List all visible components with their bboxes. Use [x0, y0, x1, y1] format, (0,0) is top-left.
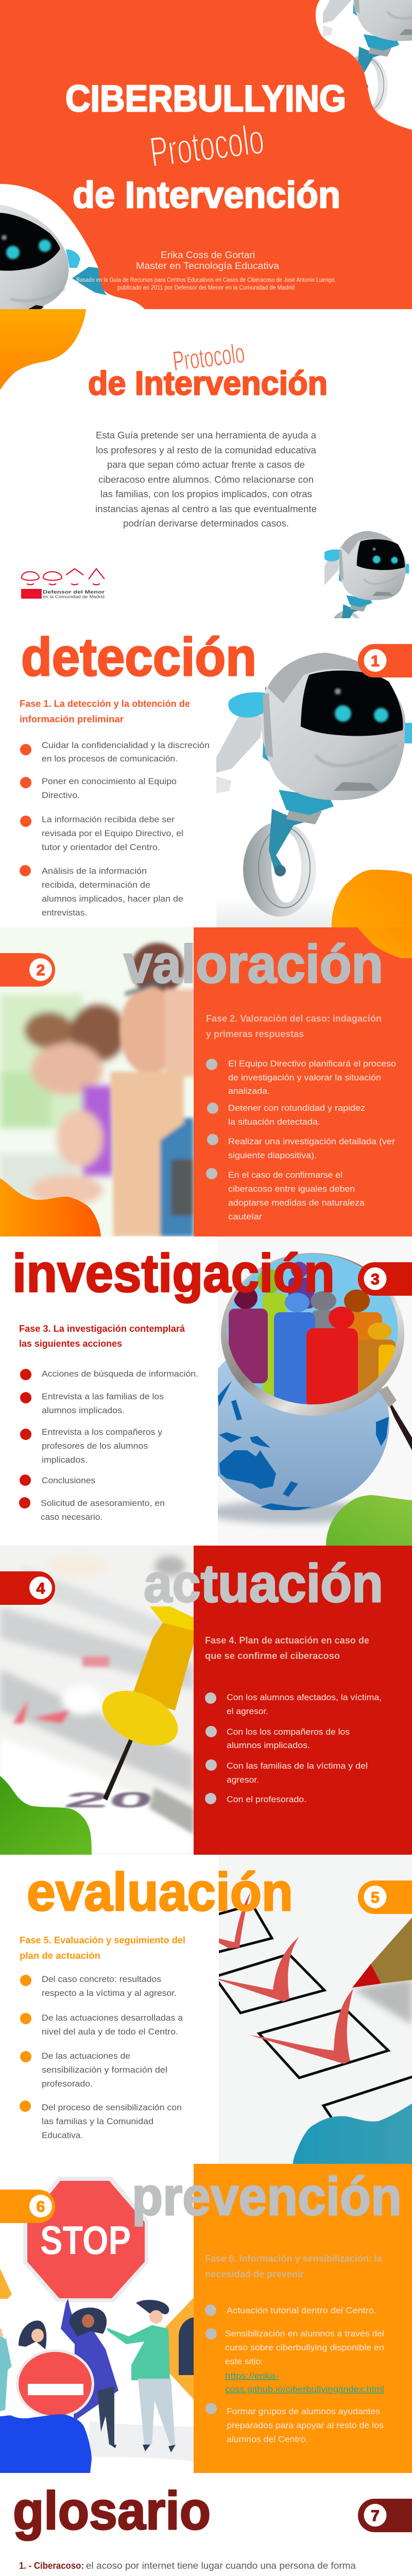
green blob	[0, 1776, 92, 1855]
bullet list: alumnos implicados.	[227, 1741, 310, 1750]
orange panel	[194, 2164, 412, 2473]
bullet list: https://erika-	[225, 2371, 279, 2381]
panel: actuación	[0, 1546, 412, 1855]
source note: Basado en la Guía de Recursos para Centros Educativos en Casos de Ciberacoso de José Antonio Luengo,	[76, 277, 336, 283]
bullet list: alumnos del Centro.	[227, 2435, 308, 2444]
bullet list: respecto a la víctima y al agresor.	[42, 1989, 177, 1998]
bullet list: profesores de los alumnos	[42, 1442, 148, 1451]
script word Protocolo: Protocolo	[171, 337, 246, 377]
bullet list: Realizar una investigación detallada (ver	[228, 1137, 396, 1146]
image: checklist with pencil	[203, 1855, 412, 2164]
phase title	[20, 1935, 185, 1961]
bullet list	[205, 1692, 382, 1804]
bullet list: ciberacoso entre iguales deben	[228, 1184, 355, 1194]
bullet list: Del caso concreto: resultados	[42, 1975, 161, 1984]
bullet list: Poner en conocimiento al Equipo	[42, 777, 177, 786]
heading investigación: investigación	[12, 1244, 335, 1303]
bullet list: las familias y la Comunidad	[42, 2117, 153, 2126]
logo: Defensor del Menor	[21, 569, 105, 599]
phase title: Fase 4. Plan de actuación en caso de	[205, 1635, 369, 1646]
phase title: que se confirme el ciberacoso	[205, 1651, 340, 1661]
badge 1	[358, 644, 412, 677]
heading de Intervención: de Intervención	[88, 364, 328, 402]
intro text: para que sepan cómo actuar frente a casos de	[107, 460, 305, 470]
heading valoración: valoración	[124, 935, 383, 994]
illustration: people with traffic signs: STOP	[40, 2217, 131, 2263]
small robot	[324, 531, 409, 618]
orange blob on panel	[357, 927, 412, 958]
bullet list: Cuidar la confidencialidad y la discreción	[42, 741, 210, 750]
bullet list: nivel del aula y de todo el Centro.	[42, 2027, 178, 2037]
badge 6	[0, 2190, 55, 2223]
photo: students at computers	[0, 927, 196, 1236]
photo: calendar with yellow pin: 20	[62, 1788, 157, 1812]
panel: glosario	[13, 2481, 412, 2576]
bullet list	[205, 2304, 384, 2444]
glossary term 1: 1. - Ciberacoso:	[19, 2561, 84, 2571]
phase title	[205, 2253, 383, 2279]
green blob	[326, 1495, 412, 1546]
title CIBERBULLYING: CIBERBULLYING	[65, 78, 346, 120]
bullet list: cautelar	[228, 1212, 263, 1222]
bullet list: profesorado.	[42, 2079, 93, 2089]
bullet list: en los procesos de comunicación.	[42, 754, 178, 764]
bullet list: La información recibida debe ser	[42, 815, 175, 824]
bullet list	[19, 1369, 198, 1522]
glossary term 1	[19, 2561, 392, 2576]
phase title: Fase 5. Evaluación y seguimiento del	[20, 1935, 185, 1945]
bullet list: Formar grupos de alumnos ayudantes	[227, 2407, 380, 2416]
phase title	[205, 1635, 369, 1661]
glossary term 1: el acoso por internet tiene lugar cuando una persona de forma	[86, 2561, 356, 2571]
blue blob	[0, 2414, 92, 2473]
heading detección: detección	[21, 628, 256, 687]
white blob with robot bottom left	[0, 184, 145, 309]
phase title: Fase 6. Información y sensibilización: la	[205, 2253, 383, 2264]
phase title: y primeras respuestas	[206, 1029, 304, 1039]
bullet list: revisada por el Equipo Directivo, el	[42, 829, 183, 838]
heading actuación: actuación	[144, 1554, 383, 1614]
bullet list: Entrevista a los compañeros y	[42, 1428, 163, 1437]
orange panel	[194, 927, 412, 1236]
bullet list: implicados.	[42, 1455, 88, 1465]
bullet list: Análisis de la información	[42, 867, 147, 876]
bullet list: alumnos implicados.	[42, 1406, 125, 1415]
orange blob	[332, 870, 412, 958]
phase title: las siguientes acciones	[19, 1338, 122, 1349]
author	[136, 249, 280, 271]
source note	[76, 277, 336, 291]
bullet list	[20, 1975, 183, 2140]
phase title: Fase 2. Valoración del caso: indagación	[206, 1013, 382, 1024]
bullet list: Solicitud de asesoramiento, en	[41, 1499, 165, 1508]
bullet list: Del proceso de sensibilización con	[42, 2103, 182, 2112]
bullet list: agresor.	[227, 1775, 259, 1785]
intro text: podrían derivarse determinados casos.	[123, 518, 289, 529]
bullet list: de investigación y valorar la situación	[228, 1073, 381, 1082]
badge 6: 6	[37, 2198, 45, 2215]
bullet list: De las actuaciones desarrolladas a	[42, 2013, 183, 2023]
phase title: información preliminar	[20, 714, 124, 724]
bullet list: El Equipo Directivo planificará el proceso	[228, 1059, 396, 1069]
author: Erika Coss de Gortari	[161, 249, 255, 260]
phase title: Fase 3. La investigación contemplará	[19, 1324, 185, 1334]
red panel	[194, 1546, 412, 1855]
white blob with robot top right	[316, 0, 412, 130]
phase title	[20, 699, 190, 724]
badge 5: 5	[371, 1889, 380, 1906]
phase title: plan de actuación	[20, 1951, 100, 1961]
badge 7	[358, 2499, 412, 2532]
bullet list: De las actuaciones de	[42, 2052, 130, 2061]
bullet list: Conclusiones	[42, 1476, 95, 1485]
badge 7: 7	[371, 2507, 380, 2524]
author: Master en Tecnología Educativa	[136, 260, 280, 271]
bullet list: Detener con rotundidad y rapidez	[228, 1104, 365, 1113]
intro text: instancias ajenas al centro a las que eventualmente	[95, 504, 317, 514]
bullet list: Con el profesorado.	[227, 1795, 306, 1804]
orange blob	[0, 309, 86, 390]
hero script word Protocolo: Protocolo	[147, 115, 267, 176]
panel: evaluación	[20, 1855, 412, 2164]
badge 2	[0, 953, 55, 987]
panel: introduction	[0, 309, 409, 618]
intro text: ciberacoso entre alumnos. Cómo relacionarse con	[98, 474, 314, 485]
intro text: los profesores y al resto de la comunidad educativa	[96, 445, 317, 455]
photo: calendar with yellow pin	[0, 1546, 194, 1855]
bullet list: En el caso de confirmarse el	[228, 1171, 342, 1180]
badge 3: 3	[371, 1271, 380, 1288]
bullet list: Con las familias de la víctima y del	[227, 1761, 368, 1771]
title de Intervención: de Intervención	[73, 175, 340, 216]
bullet list: el agresor.	[227, 1707, 268, 1716]
panel: prevención	[0, 2164, 412, 2473]
bullet list: caso necesario.	[41, 1513, 102, 1522]
bullet list: Con los alumnos afectados, la víctima,	[227, 1693, 382, 1702]
bullet list: la situación detectada.	[228, 1117, 320, 1127]
bullet list: tutor y orientador del Centro.	[42, 843, 160, 852]
bullet list: curso sobre ciberbullying disponible en	[225, 2343, 384, 2352]
bullet list: Entrevista a las familias de los	[42, 1392, 164, 1401]
badge 1: 1	[371, 653, 380, 670]
source note: publicado en 2011 por Defensor del Menor en la Comunidad de Madrid	[117, 285, 295, 291]
bullet list: coss.github.io/ciberbullying/index.html	[225, 2385, 384, 2394]
logo: Defensor del Menor: en la Comunidad de Madrid	[43, 594, 105, 599]
robot image	[216, 653, 412, 927]
bullet list: analizada.	[228, 1087, 270, 1096]
bullet list: Acciones de búsqueda de información.	[42, 1369, 198, 1379]
bullet list: entrevistas.	[42, 908, 87, 918]
intro text: las familias, con los propios implicados, con otras	[100, 489, 312, 499]
bullet list: Directivo.	[42, 791, 80, 800]
heading evaluación: evaluación	[27, 1862, 293, 1922]
bullet list: Actuación tutorial dentro del Centro.	[227, 2306, 376, 2315]
logo: Defensor del Menor: Defensor del Menor	[43, 589, 105, 595]
orange blob bottom left	[0, 1178, 101, 1236]
panel: detección	[20, 635, 412, 927]
illustration: people with traffic signs	[0, 2164, 194, 2473]
bullet list	[206, 1059, 396, 1222]
phase title: necesidad de prevenir	[205, 2269, 304, 2279]
teal blob	[293, 2104, 412, 2164]
heading glosario: glosario	[13, 2481, 211, 2541]
bullet list: preparados para apoyar al resto de los	[227, 2421, 384, 2430]
bullet list	[20, 741, 210, 918]
heading prevención: prevención	[132, 2167, 402, 2227]
panel: investigación	[12, 1236, 412, 1546]
bullet list: siguiente diapositiva).	[228, 1151, 317, 1160]
badge 3	[358, 1262, 412, 1296]
phase title: Fase 1. La detección y la obtención de	[20, 699, 190, 709]
phase title	[19, 1324, 185, 1349]
bullet list: Sensibilización en alumnos a través del	[225, 2329, 384, 2338]
badge 4: 4	[37, 1580, 45, 1597]
badge 4	[0, 1571, 55, 1605]
intro text	[95, 430, 317, 529]
bullet list: alumnos implicados, hacer plan de	[42, 894, 183, 904]
bullet list: Educativa.	[42, 2131, 83, 2140]
bullet list: adoptarse medidas de naturaleza	[228, 1198, 365, 1208]
badge 2: 2	[37, 962, 45, 979]
bullet list: recibida, determinación de	[42, 880, 150, 890]
badge 5	[358, 1880, 412, 1914]
intro text: Esta Guía pretende ser una herramienta de ayuda a	[96, 430, 317, 440]
panel: hero	[0, 0, 412, 309]
bullet list: Con los los compañeros de los	[227, 1727, 350, 1737]
phase title	[206, 1013, 382, 1039]
bullet list: sensibilización y formación del	[42, 2065, 167, 2075]
bullet list: este sitio:	[225, 2357, 263, 2366]
image: globe and magnifier with people	[218, 1253, 412, 1530]
panel: valoración	[0, 927, 412, 1236]
